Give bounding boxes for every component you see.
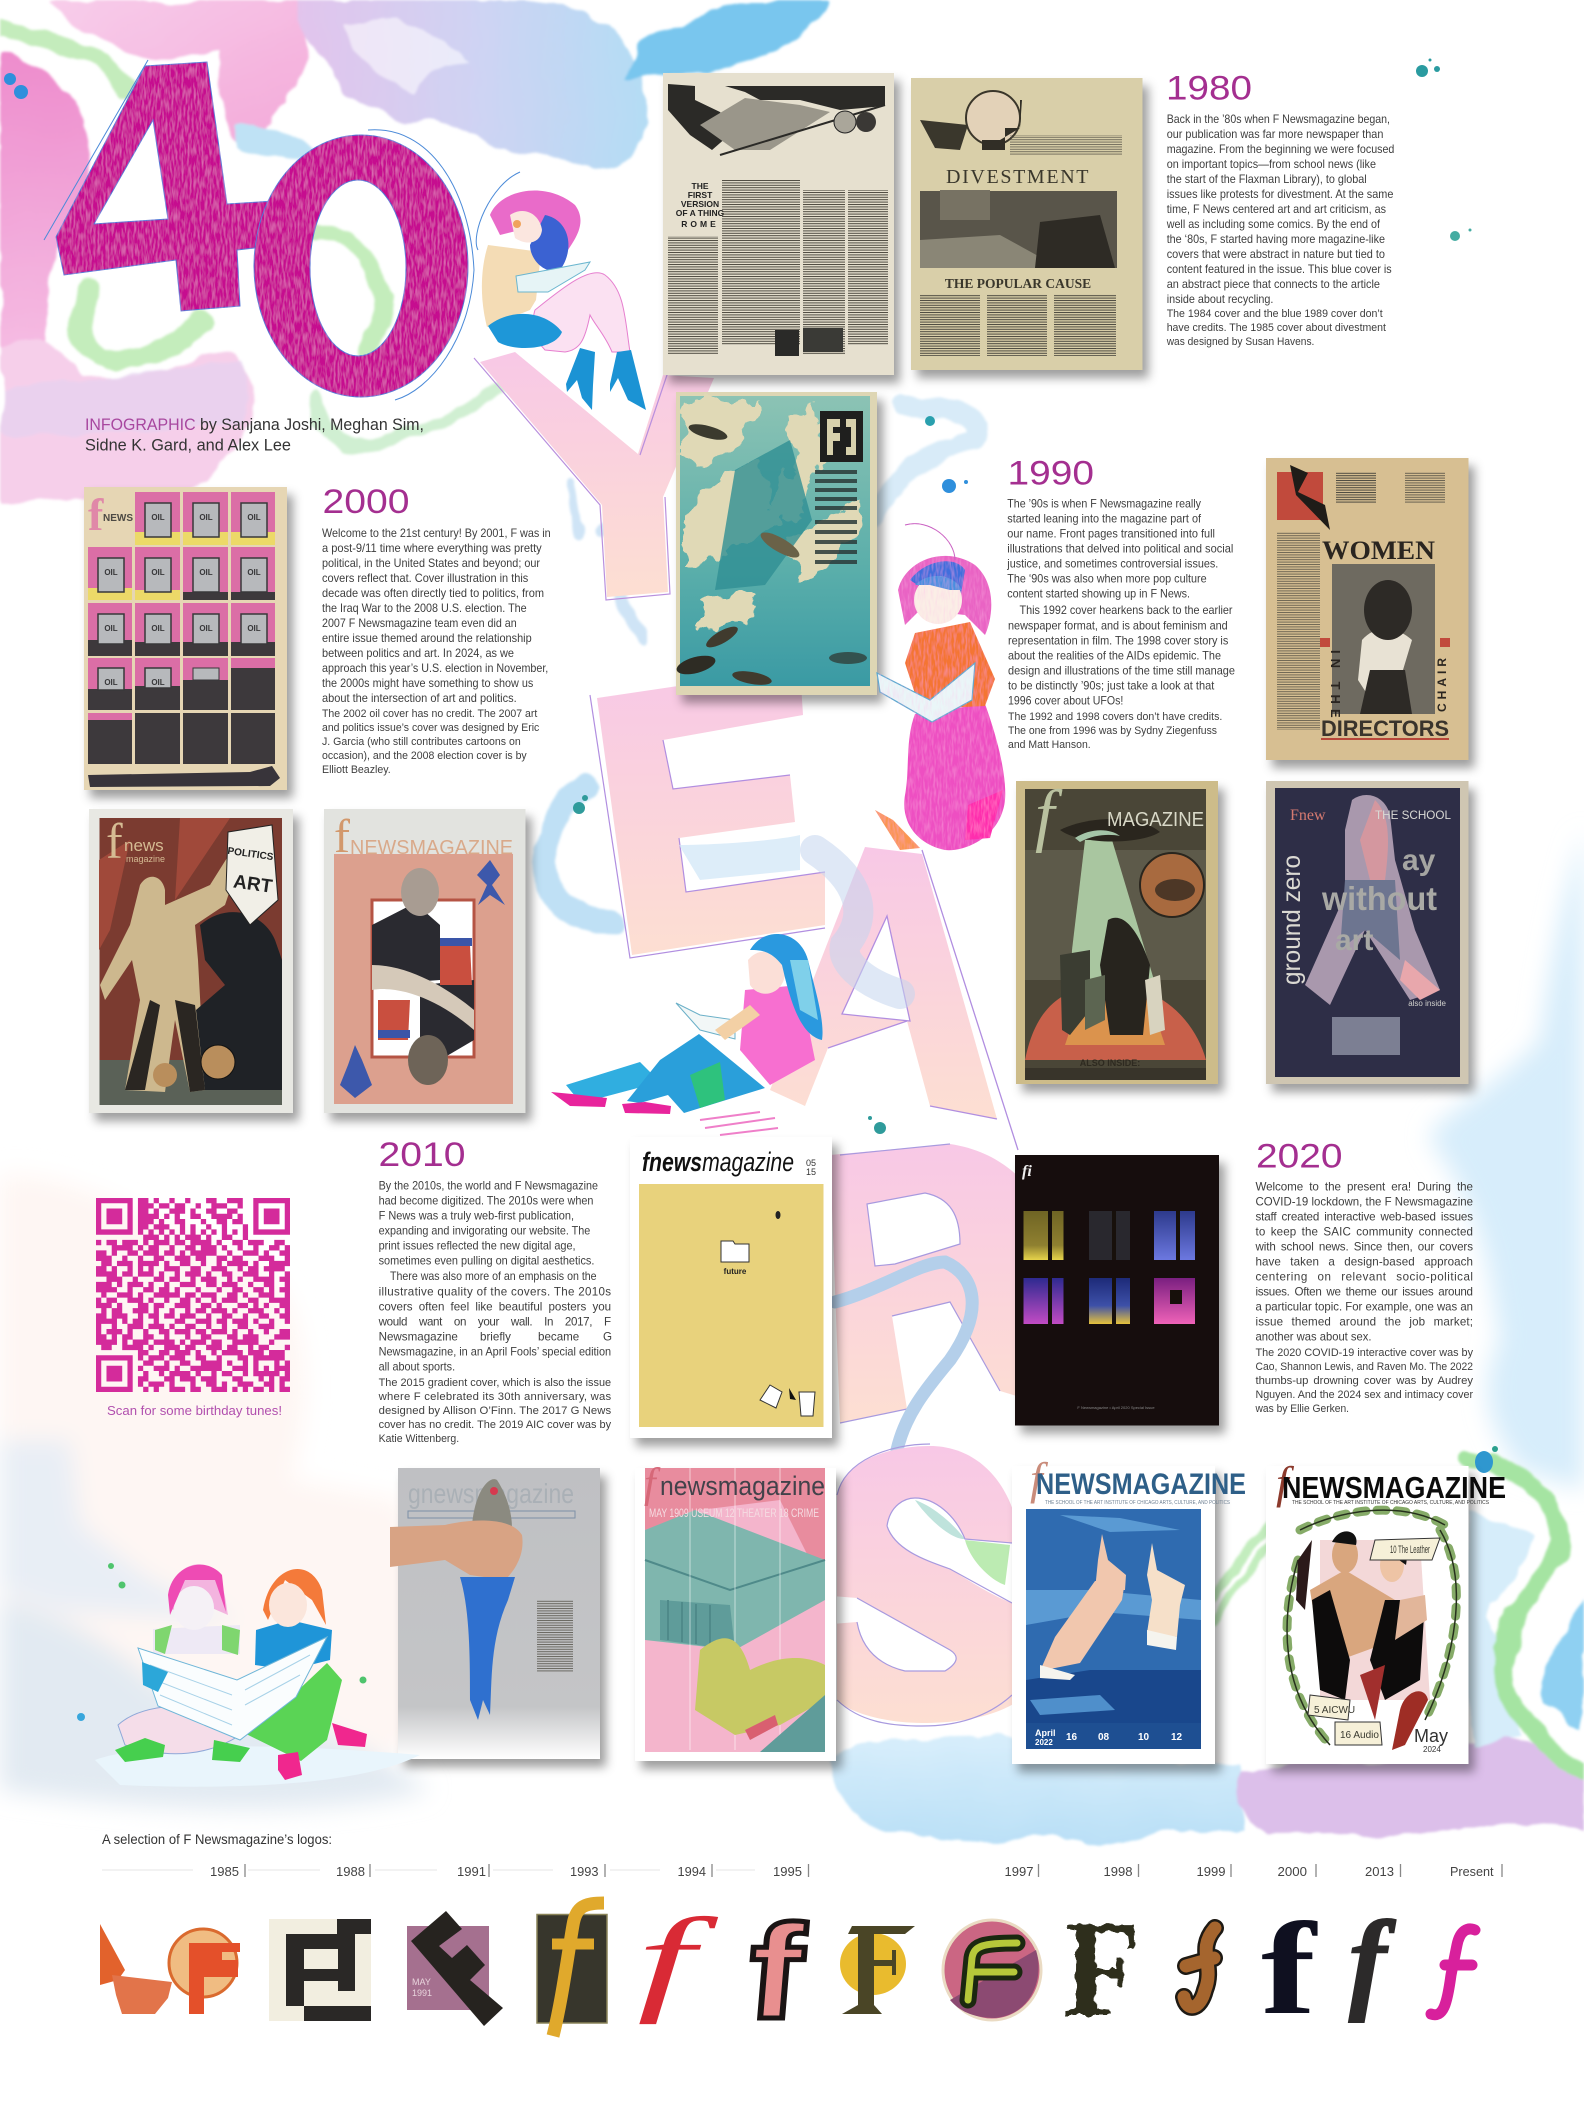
illustration: woman leaning on the A: [551, 934, 823, 1135]
text block: 1980: covers that were abstract in nature but tied to: [1167, 247, 1385, 261]
logo: 2013 black serif f: f: [1261, 1896, 1318, 2042]
cover: 2022 thumbs up: 16: [1066, 1732, 1078, 1743]
cover: 1984 first version: OF A THING: [676, 208, 725, 218]
text block: 2010: briefly: [480, 1331, 511, 1344]
logo: 1994 red f: f: [637, 1894, 719, 2025]
text block: 2000: about the intersection of art and politics.: [322, 691, 517, 705]
masthead: f: [88, 489, 104, 540]
big letter S: [832, 1444, 1020, 1726]
logo: present magenta f: [1431, 1929, 1475, 2015]
cover: 2002 oil: OIL: [104, 568, 118, 577]
heading: 2020: 2020: [1256, 1138, 1342, 1176]
heading: 1990: 1990: [1008, 455, 1094, 493]
text block: 1980: well as including some comics. By the end of: [1166, 217, 1381, 231]
cover: 2022 thumbs up: 12: [1171, 1732, 1183, 1743]
logo timeline years: 1998: [1104, 1864, 1132, 1879]
cover: 2022 thumbs up: THE SCHOOL OF THE ART INSTITUTE OF CHICAGO ARTS, CULTURE, AND POLITICS: [1045, 1500, 1231, 1506]
text block: 2020: staff created interactive web-based issues: [1256, 1211, 1473, 1224]
text block: 2010: [378, 1178, 612, 1445]
logo timeline years: 2013: [1365, 1864, 1394, 1879]
cover: 2024 sex and intimacy: 10 The Leather: [1390, 1544, 1430, 1556]
cover: 1984 first version: [663, 73, 894, 375]
cover: 2002 oil: OIL: [247, 568, 261, 577]
cover: 2022 thumbs up: April: [1035, 1728, 1056, 1738]
big letter Y: [474, 352, 714, 600]
numeral 4: [56, 62, 280, 311]
text block: 2000: a post-9/11 time where everything was pretty: [322, 541, 542, 555]
cover: 2022 thumbs up: f: [1030, 1453, 1049, 1504]
text block: 2010: all about sports.: [379, 1360, 455, 1374]
text block: 1990: 1996 cover about UFOs!: [1008, 694, 1123, 708]
cover: 2022 thumbs up: 08: [1098, 1732, 1110, 1743]
logo: 1993 gold f: [537, 1903, 607, 2036]
text block: 2000: [322, 526, 551, 776]
text block: 1980: Back in the ’80s when F Newsmagazine began,: [1167, 112, 1390, 126]
text block: 2010: Newsmagazine: [379, 1331, 458, 1344]
text block: 2010: sometimes even pulling on digital aesthetics.: [379, 1253, 594, 1267]
cover: 1998 day without art: ay: [1402, 844, 1436, 877]
text block: 2020: thumbs-up drowning cover was by Audrey: [1256, 1375, 1473, 1387]
logo: 2000 ornate brown f: [1184, 1928, 1215, 2007]
text block: 2000: decade was often directly tied to politics, from: [322, 586, 544, 600]
cover: 2002 oil: OIL: [199, 568, 213, 577]
cover: 2024 sex and intimacy: [1266, 1457, 1506, 1764]
cover: 2015 gradient yellow: [630, 1137, 832, 1438]
cover: 1992 women in the directors chair: DIRECTORS: [1321, 716, 1449, 741]
text block: 2010: had become digitized. The 2010s were when: [379, 1193, 593, 1207]
text block: 2020: with school news. Since then, our covers: [1254, 1241, 1473, 1254]
text block: 2000: Welcome to the 21st century! By 2001, F was in: [322, 526, 551, 540]
logo timeline years: 1999: [1196, 1864, 1226, 1879]
cover: 2007 politics and art: ART: [232, 871, 274, 898]
cover: 2008 election: [324, 809, 526, 1113]
text block: 2000: entire issue themed around the relationship: [322, 631, 532, 645]
cover: 2024 sex and intimacy: 2024: [1423, 1745, 1441, 1754]
text block: 2000: approach this year’s U.S. election in November,: [322, 661, 548, 675]
cover: 2002 oil: NEWS: [103, 513, 133, 524]
cover: 2002 oil: OIL: [247, 624, 261, 633]
cover: 2007 politics and art: [89, 809, 293, 1113]
text block: 1990: content started showing up in F News.: [1007, 587, 1190, 601]
text block: 2000: the Iraq War to the 2008 U.S. election. The: [322, 601, 527, 615]
cover: 2002 oil: OIL: [199, 624, 213, 633]
QR code: [96, 1201, 290, 1389]
logo: 1995 outlined f: f: [743, 1898, 809, 2047]
text block: 2020: to keep the SAIC community connected: [1256, 1226, 1473, 1239]
heading: 2010: 2010: [378, 1136, 466, 1174]
text block: 2020: have taken a design-based approach: [1256, 1256, 1473, 1269]
sketch lines around the 40: [44, 60, 474, 400]
cover: 2022 thumbs up: NEWSMAGAZINE: [1036, 1468, 1246, 1501]
text block: 1980: issues like protests for divestment. At the same: [1167, 187, 1394, 201]
text block: 2000: political, in the United States and beyond; our: [322, 556, 540, 570]
text block: 2010: By the 2010s, the world and F Newsmagazine: [379, 1178, 598, 1192]
logos heading: A selection of F Newsmagazine’s logos:: [102, 1832, 332, 1847]
logo: 1985 hand and F: [100, 1924, 240, 2014]
cover: 2002 oil: OIL: [104, 624, 118, 633]
text block: 2010: would want on your wall. In 2017, F: [378, 1316, 611, 1329]
logo: 1999 distressed F: F: [1064, 1893, 1140, 2045]
big letter E: [590, 668, 825, 958]
text block: 2000: Elliott Beazley.: [322, 764, 391, 776]
cover: 1998 day without art: art: [1335, 924, 1373, 957]
text block: 2010: where F celebrated its 30th anniversary, was: [378, 1391, 611, 1403]
text block: 2020: The 2020 COVID-19 interactive cover was by: [1256, 1347, 1473, 1359]
cover: 2002 oil: OIL: [151, 568, 165, 577]
text block: 1980: inside about recycling.: [1167, 292, 1273, 306]
cover: 1998 day without art: without: [1321, 880, 1437, 917]
text block: 1980: on important topics—from school news (like: [1167, 157, 1376, 171]
text block: 1990: representation in film. The 1998 cover story is: [1008, 634, 1228, 648]
cover: 2024 sex and intimacy: NEWSMAGAZINE: [1282, 1470, 1506, 1505]
text block: 2010: The 2015 gradient cover, which is also the issue: [379, 1377, 611, 1389]
cover: 2019 AIC: newsmagazine: [660, 1471, 825, 1501]
logo timeline years: 1994: [678, 1864, 706, 1879]
cover: 1996 UFO issue: MAGAZINE: [1107, 809, 1204, 831]
cover: 2024 sex and intimacy: 5 AICWU: [1314, 1705, 1355, 1716]
cover: 2019 AIC: f: [644, 1461, 661, 1507]
logo timeline years: 1995: [773, 1864, 802, 1879]
big letter R: [830, 1144, 1030, 1450]
text block: 1980: magazine. From the beginning we were focused: [1167, 142, 1394, 156]
text block: 2000: and politics issue’s cover was designed by Eric: [322, 722, 540, 734]
text block: 2020: centering on relevant socio-political: [1256, 1271, 1473, 1284]
text block: 1980: content featured in the issue. This blue cover is: [1167, 262, 1392, 276]
cover: 2019 AIC: [635, 1461, 836, 1761]
text block: 2010: illustrative quality of the covers. The 2010s: [379, 1286, 611, 1299]
cover: 1998 day without art: ground zero: [1278, 855, 1306, 985]
logo: 1991 rotated F: 1991: [412, 1988, 432, 1998]
text block: 1980: have credits. The 1985 cover about divestment: [1167, 322, 1387, 334]
logo timeline years: [102, 1864, 1502, 1879]
text block: 2010: covers often feel like beautiful posters you: [379, 1301, 611, 1314]
text block: 2000: J. Garcia (who still contributes cartoons on: [322, 736, 521, 748]
cover: 2007 politics and art: POLITICS: [227, 846, 274, 863]
cover: 2002 oil: OIL: [151, 624, 165, 633]
cover: 1985 divestment: DIVESTMENT: [946, 166, 1091, 188]
text block: 2010: print issues reflected the new digital age,: [379, 1238, 576, 1252]
cover: 2007 politics and art: f: [106, 813, 123, 869]
cover: 2007 politics and art: magazine: [126, 854, 165, 864]
cover: 1985 divestment: [911, 78, 1142, 370]
text block: 2020: Cao, Shannon Lewis, and Raven Mo. The 2022: [1256, 1361, 1473, 1373]
numeral 0: [254, 135, 468, 397]
cover: 1996 UFO issue: ALSO INSIDE:: [1080, 1058, 1140, 1068]
cover: 2020 dark windows: [1015, 1155, 1219, 1426]
cover: 1998 day without art: also inside: [1408, 999, 1447, 1008]
text block: 2010: Katie Wittenberg.: [379, 1433, 459, 1445]
big number 40: [56, 62, 468, 397]
text block: 2000: The 2002 oil cover has no credit. The 2007 art: [322, 708, 538, 720]
illustration: girl reading on the 1990 spread: [875, 524, 1005, 850]
text block: 1980: the start of the Flaxman Library), to global: [1167, 172, 1367, 186]
text block: 2020: Nguyen. And the 2024 sex and intimacy cover: [1256, 1389, 1473, 1401]
text block: 2000: between politics and art. In 2024, as we: [322, 646, 514, 660]
logo timeline years: 1991: [457, 1864, 486, 1879]
cover: 2002 oil: OIL: [151, 678, 165, 687]
cover: 2020 dark windows: F Newsmagazine • April 2020 Special Issue: [1077, 1405, 1155, 1410]
cover: 1992 women in the directors chair: CHAIR: [1435, 654, 1449, 712]
text block: 1990: our name. Front pages transitioned into full: [1007, 527, 1215, 541]
cover: 1984 first version: ROME: [681, 219, 719, 229]
cover: 2002 oil: OIL: [199, 513, 213, 522]
cover: 2022 thumbs up: 10: [1138, 1732, 1150, 1743]
cover: 2007 politics and art: news: [124, 836, 164, 855]
text block: 1990: The one from 1996 was by Sydny Ziegenfuss: [1008, 725, 1217, 737]
cover: 2017 G newsmagazine: gnewsmagazine: [408, 1478, 574, 1509]
cover: 2008 election: NEWSMAGAZINE: [350, 837, 513, 859]
cover: 2024 sex and intimacy: f: [1276, 1457, 1295, 1508]
cover: 1992 women in the directors chair: IN THE: [1328, 650, 1343, 723]
cover: 1998 day without art: Fnew: [1290, 807, 1326, 824]
text block: 1990: justice, and sometimes controversial issues.: [1006, 557, 1218, 571]
QR caption: Scan for some birthday tunes!: [107, 1403, 282, 1418]
big letter A: [770, 847, 1018, 1150]
text block: 2010: G: [603, 1331, 612, 1344]
text block: 2010: designed by Allison O’Finn. The 2017 G News: [379, 1405, 611, 1417]
cover: 2002 oil: [84, 487, 287, 790]
cover: 1985 divestment: THE POPULAR CAUSE: [945, 276, 1091, 291]
cover: 1998 day without art: THE SCHOOL: [1375, 808, 1451, 822]
cover: 2024 sex and intimacy: 16 Audio: [1340, 1730, 1379, 1741]
text block: 2000: occasion), and the 2008 election cover is by: [322, 750, 527, 762]
cover: 2024 sex and intimacy: THE SCHOOL OF THE ART INSTITUTE OF CHICAGO ARTS, CULTURE, AND POLITICS: [1292, 1500, 1490, 1506]
text block: 1980: [1166, 112, 1394, 348]
text block: 2020: Welcome to the present era! During the: [1256, 1181, 1473, 1194]
paint splatters: [4, 58, 1498, 1473]
text block: 1980: the ‘80s, F started having more magazine-like: [1167, 232, 1385, 246]
text block: 2010: expanding and invigorating our website. The: [379, 1223, 591, 1237]
text block: 2020: was by Ellie Gerken.: [1255, 1403, 1349, 1415]
cover: 2002 oil: OIL: [104, 678, 118, 687]
text block: 1990: illustrations that delved into political and social: [1007, 542, 1233, 556]
text block: 1990: The ‘90s was also when more pop culture: [1007, 572, 1207, 586]
cover: 1992 women in the directors chair: [1266, 458, 1468, 760]
cover: 2017 G newsmagazine: [390, 1468, 600, 1759]
text block: 2000: the 2000s might have something to show us: [322, 676, 533, 690]
text block: 1990: The 1992 and 1998 covers don’t have credits.: [1008, 711, 1222, 723]
cover: 2019 AIC: MAY 1909 USEUM 12 THEATER 18 CRIME: [649, 1506, 819, 1520]
logo: present dark f: f: [1349, 1899, 1396, 2023]
text block: 2020: COVID-19 lockdown, the F Newsmagazine: [1256, 1196, 1473, 1209]
text block: 2020: issue themed around the job market;: [1256, 1316, 1473, 1329]
cover: 2002 oil: OIL: [151, 513, 165, 522]
logo: 1991 rotated F: MAY: [412, 1977, 431, 1987]
heading: 2000: 2000: [322, 483, 410, 521]
text block: 1980: an abstract piece that connects to the article: [1167, 277, 1380, 291]
cover: 1996 UFO issue: [1016, 777, 1218, 1084]
logo: 1988 block E: [269, 1919, 371, 2021]
logo: 1998 round F badge: [943, 1920, 1041, 2020]
logo timeline years: 1988: [336, 1864, 365, 1879]
logo: 1997 gold circle F: [840, 1926, 915, 2014]
illustration: two kids reading: [77, 1563, 420, 1787]
text block: 2000: covers reflect that. Cover illustration in this: [322, 571, 528, 585]
cover: 2008 election: f: [334, 810, 350, 863]
text block: 1990: about the realities of the AIDs epidemic. The: [1008, 649, 1221, 663]
cover: 2002 oil: OIL: [247, 513, 261, 522]
cover: 2015 gradient yellow: fnewsmagazine: [642, 1147, 794, 1177]
text block: 1980: The 1984 cover and the blue 1989 cover don’t: [1167, 308, 1384, 320]
text block: 1980: our publication was far more newspaper than: [1167, 127, 1383, 141]
text block: 1990: started leaning into the magazine part of: [1007, 512, 1202, 526]
cover: 1989 blue fish: [675, 392, 877, 695]
text block: 2000: 2007 F Newsmagazine team even did an: [322, 616, 517, 630]
text block: 1990: The ’90s is when F Newsmagazine really: [1007, 497, 1201, 511]
cover: 1984 first version: THE: [692, 181, 709, 191]
cover: 2015 gradient yellow: 15: [806, 1167, 816, 1177]
text block: 2010: became: [538, 1331, 579, 1344]
cover: 2024 sex and intimacy: May: [1414, 1726, 1448, 1746]
text block: 1990: newspaper format, and is about feminism and: [1008, 619, 1228, 633]
logo timeline years: 1997: [1004, 1864, 1034, 1879]
cover: 2022 thumbs up: 2022: [1035, 1738, 1053, 1747]
logo timeline years: Present: [1450, 1864, 1494, 1879]
text block: 2020: another was about sex.: [1256, 1331, 1372, 1344]
logo timeline years: 1993: [570, 1864, 598, 1879]
text block: 1990: to be distinctly ’90s; just take a look at that: [1008, 679, 1215, 693]
cover: 1992 women in the directors chair: WOMEN: [1322, 536, 1435, 565]
cover: 2022 thumbs up: [1012, 1453, 1246, 1764]
text block: 2010: F News was a truly web-first publication,: [379, 1208, 574, 1222]
logo: 1991 rotated F: [407, 1911, 503, 2026]
logo timeline years: 1985: [210, 1864, 239, 1879]
credit: byline second line: Sidne K. Gard, and Alex Lee: [85, 436, 291, 454]
text block: 2020: issues. Often we theme our issues around: [1256, 1286, 1473, 1299]
text block: 2020: [1254, 1181, 1473, 1415]
cover: 1996 UFO issue: f: [1035, 777, 1063, 854]
text block: 2020: a particular topic. For example, one was an: [1256, 1301, 1473, 1314]
text block: 1990: This 1992 cover hearkens back to the earlier: [1020, 603, 1233, 617]
text block: 1990: [1006, 497, 1235, 751]
text block: 1980: time, F News centered art and art criticism, as: [1167, 202, 1386, 216]
cover: 1984 first version: VERSION: [681, 199, 719, 209]
cover: 1998 day without art: [1266, 781, 1468, 1084]
text block: 2010: Newsmagazine, in an April Fools’ special edition: [379, 1345, 611, 1359]
text block: 2010: cover has no credit. The 2019 AIC cover was by: [379, 1419, 611, 1431]
logo timeline years: 2000: [1278, 1864, 1307, 1879]
cover: 1984 first version: FIRST: [688, 190, 713, 200]
cover: 2015 gradient yellow: future: [724, 1267, 747, 1276]
text block: 1990: and Matt Hanson.: [1008, 739, 1091, 751]
text block: 1990: design and illustrations of the time still manage: [1008, 664, 1235, 678]
illustration: woman sitting on the Y: [476, 172, 646, 410]
heading: 1980: 1980: [1166, 70, 1252, 108]
cover: 2015 gradient yellow: 05: [806, 1158, 816, 1168]
cover: 2020 dark windows: fi: [1022, 1163, 1032, 1180]
text block: 2010: There was also more of an emphasis on the: [390, 1269, 597, 1283]
credit: infographic byline: INFOGRAPHIC by Sanjana Joshi, Meghan Sim,: [85, 415, 424, 434]
text block: 1980: was designed by Susan Havens.: [1166, 336, 1314, 348]
